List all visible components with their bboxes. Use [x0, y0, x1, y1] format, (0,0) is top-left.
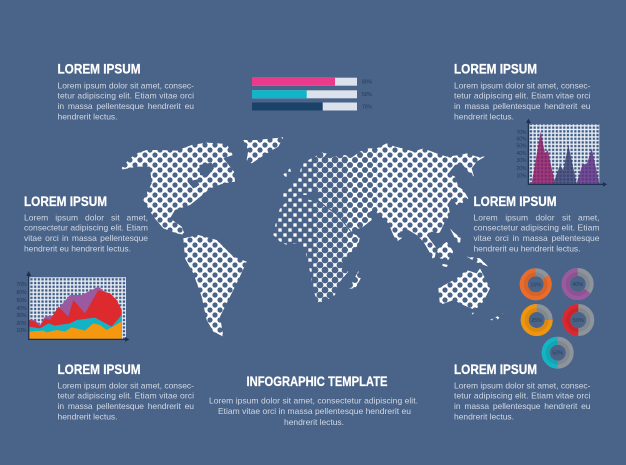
- text block: middle right: consectetur adipiscing elit. Etiam: [474, 223, 600, 233]
- text block: bottom right: tetur adipiscing elit. Etiam vitae orci: [454, 391, 591, 401]
- text block: bottom left: hendrerit lectus.: [58, 411, 118, 421]
- map: south america: [183, 235, 247, 337]
- text block: top left: [58, 62, 194, 121]
- text block: middle right: hendrerit eu hendrerit lectus.: [474, 243, 580, 253]
- progress bars: 80%: [362, 80, 373, 86]
- text block: top left: LOREM IPSUM: [58, 62, 140, 76]
- donut: 50% teal: 50%: [552, 351, 563, 357]
- title: infographic template: hendrerit lectus.: [284, 417, 344, 427]
- chart: layered area chart: 70%: [16, 282, 27, 288]
- text block: middle right: vitae orci in massa pellentesque: [474, 233, 600, 243]
- text block: top right: [454, 62, 591, 121]
- text block: middle left: vitae orci in massa pellentesque: [24, 233, 148, 243]
- map: north america: [120, 143, 235, 235]
- donut: 50% red: 50%: [573, 318, 584, 324]
- text block: top right: tetur adipiscing elit. Etiam vitae orci: [454, 91, 591, 101]
- text block: top left: tetur adipiscing elit. Etiam vitae orci: [58, 91, 194, 101]
- text block: middle right: [474, 194, 600, 253]
- text block: top right: Lorem ipsum dolor sit amet, consec-: [454, 80, 591, 90]
- text block: top right: in massa pellentesque hendrerit eu: [454, 101, 591, 111]
- text block: bottom right: hendrerit lectus.: [454, 411, 514, 421]
- title: infographic template: Lorem ipsum dolor sit amet, consectetur adipiscing elit.: [209, 396, 418, 406]
- chart: peaks area chart: 20%: [516, 166, 527, 172]
- text block: bottom right: LOREM IPSUM: [454, 362, 537, 377]
- text block: bottom left: LOREM IPSUM: [58, 362, 140, 377]
- text block: bottom right: in massa pellentesque hendrerit eu: [454, 401, 591, 411]
- chart: layered area chart: [16, 271, 130, 342]
- title: infographic template: Etiam vitae orci in massa pellentesque hendrerit eu: [218, 406, 411, 416]
- text block: middle right: LOREM IPSUM: [474, 194, 556, 209]
- chart: peaks area chart: 30%: [516, 158, 527, 164]
- text block: middle left: [24, 194, 148, 253]
- text block: bottom left: Lorem ipsum dolor sit amet, consec-: [58, 380, 194, 390]
- title: infographic template: INFOGRAPHIC TEMPLATE: [246, 374, 388, 389]
- text block: middle left: LOREM IPSUM: [24, 194, 107, 209]
- text block: bottom left: in massa pellentesque hendrerit eu: [58, 401, 194, 411]
- chart: peaks area chart: 60%: [516, 136, 527, 142]
- text block: top right: LOREM IPSUM: [454, 62, 537, 76]
- donut: 40% purple: 40%: [572, 282, 583, 288]
- text block: middle left: hendrerit eu hendrerit lectus.: [24, 243, 131, 253]
- chart: layered area chart: 10%: [16, 328, 27, 334]
- donut: 15% orange: 15%: [530, 282, 541, 288]
- text block: bottom left: [58, 362, 194, 421]
- text block: top left: hendrerit lectus.: [58, 111, 118, 121]
- text block: middle right: Lorem ipsum dolor sit amet,: [474, 212, 600, 222]
- chart: layered area chart: 60%: [16, 290, 27, 296]
- chart: layered area chart: 20%: [16, 321, 27, 327]
- title: infographic template: [209, 374, 418, 427]
- text block: middle left: consectetur adipiscing elit. Etiam: [24, 223, 148, 233]
- chart: peaks area chart: 50%: [516, 144, 527, 150]
- map: greenland: [243, 137, 283, 163]
- progress bars: [252, 78, 373, 110]
- donut charts: [524, 272, 590, 365]
- chart: peaks area chart: 10%: [516, 174, 527, 180]
- text block: bottom right: [454, 362, 591, 421]
- world map: [120, 135, 510, 337]
- donut: 25% amber: 25%: [531, 318, 542, 324]
- text block: bottom left: tetur adipiscing elit. Etiam vitae orci: [58, 391, 194, 401]
- text block: top right: hendrerit lectus.: [454, 111, 514, 121]
- progress bars: 70%: [362, 104, 373, 110]
- map: eurasia africa and oceania: [270, 135, 510, 322]
- progress bars: 50%: [362, 92, 373, 98]
- text block: middle left: Lorem ipsum dolor sit amet,: [24, 212, 148, 222]
- chart: peaks area chart: [516, 118, 607, 187]
- text block: top left: in massa pellentesque hendrerit eu: [58, 101, 194, 111]
- text block: bottom right: Lorem ipsum dolor sit amet, consec-: [454, 380, 591, 390]
- chart: peaks area chart: 40%: [516, 151, 527, 157]
- text block: top left: Lorem ipsum dolor sit amet, consec-: [58, 80, 194, 90]
- chart: peaks area chart: 70%: [516, 130, 527, 136]
- chart: layered area chart: 30%: [16, 313, 27, 319]
- chart: layered area chart: 50%: [16, 298, 27, 304]
- chart: layered area chart: 40%: [16, 306, 27, 312]
